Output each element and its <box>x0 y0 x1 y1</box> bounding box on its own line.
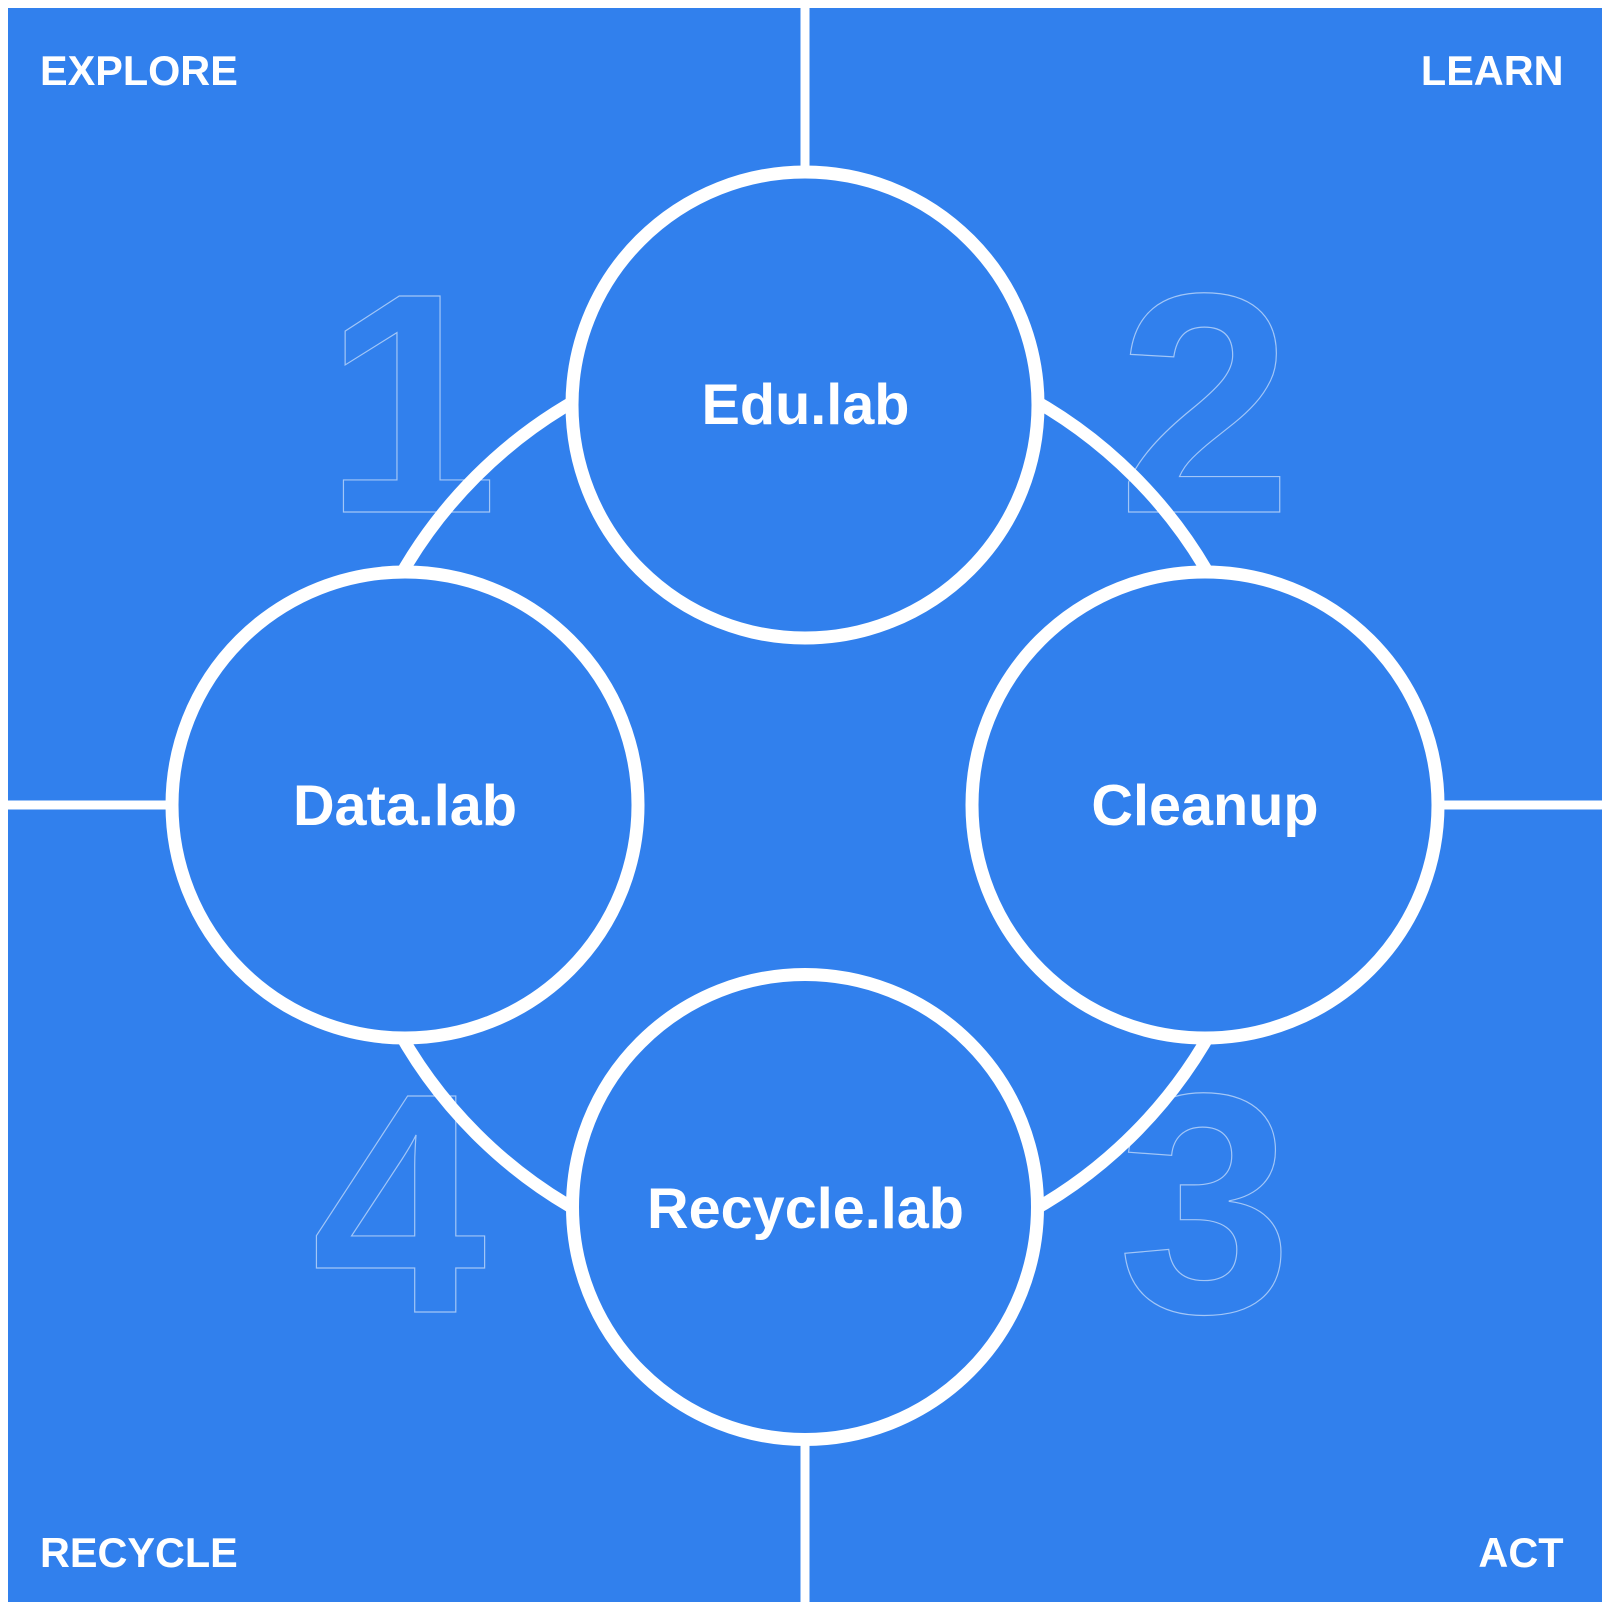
circle: Cleanup <box>972 572 1438 1038</box>
heading: EXPLORE: EXPLORE <box>40 48 238 94</box>
heading: RECYCLE: RECYCLE <box>40 1530 238 1576</box>
circle: Recycle.lab: Recycle.lab <box>647 1177 964 1241</box>
heading: LEARN: LEARN <box>1421 48 1564 94</box>
connecting ring <box>340 340 1270 1270</box>
top divider <box>800 0 810 172</box>
bottom divider <box>800 1439 810 1610</box>
right divider <box>1438 800 1610 810</box>
number 3: 3 <box>1118 1028 1292 1379</box>
left divider <box>0 800 172 810</box>
circle: Cleanup: Cleanup <box>1091 774 1319 838</box>
circle: Data.lab: Data.lab <box>293 774 517 838</box>
number 1: 1 <box>324 228 498 579</box>
number 4: 4 <box>312 1028 488 1379</box>
number 2: 2 <box>1118 228 1292 579</box>
circle: Recycle.lab <box>572 974 1038 1440</box>
heading: ACT: ACT <box>1478 1530 1564 1576</box>
circle: Edu.lab <box>572 172 1038 638</box>
circle: Data.lab <box>172 572 638 1038</box>
circle: Edu.lab: Edu.lab <box>702 373 910 437</box>
